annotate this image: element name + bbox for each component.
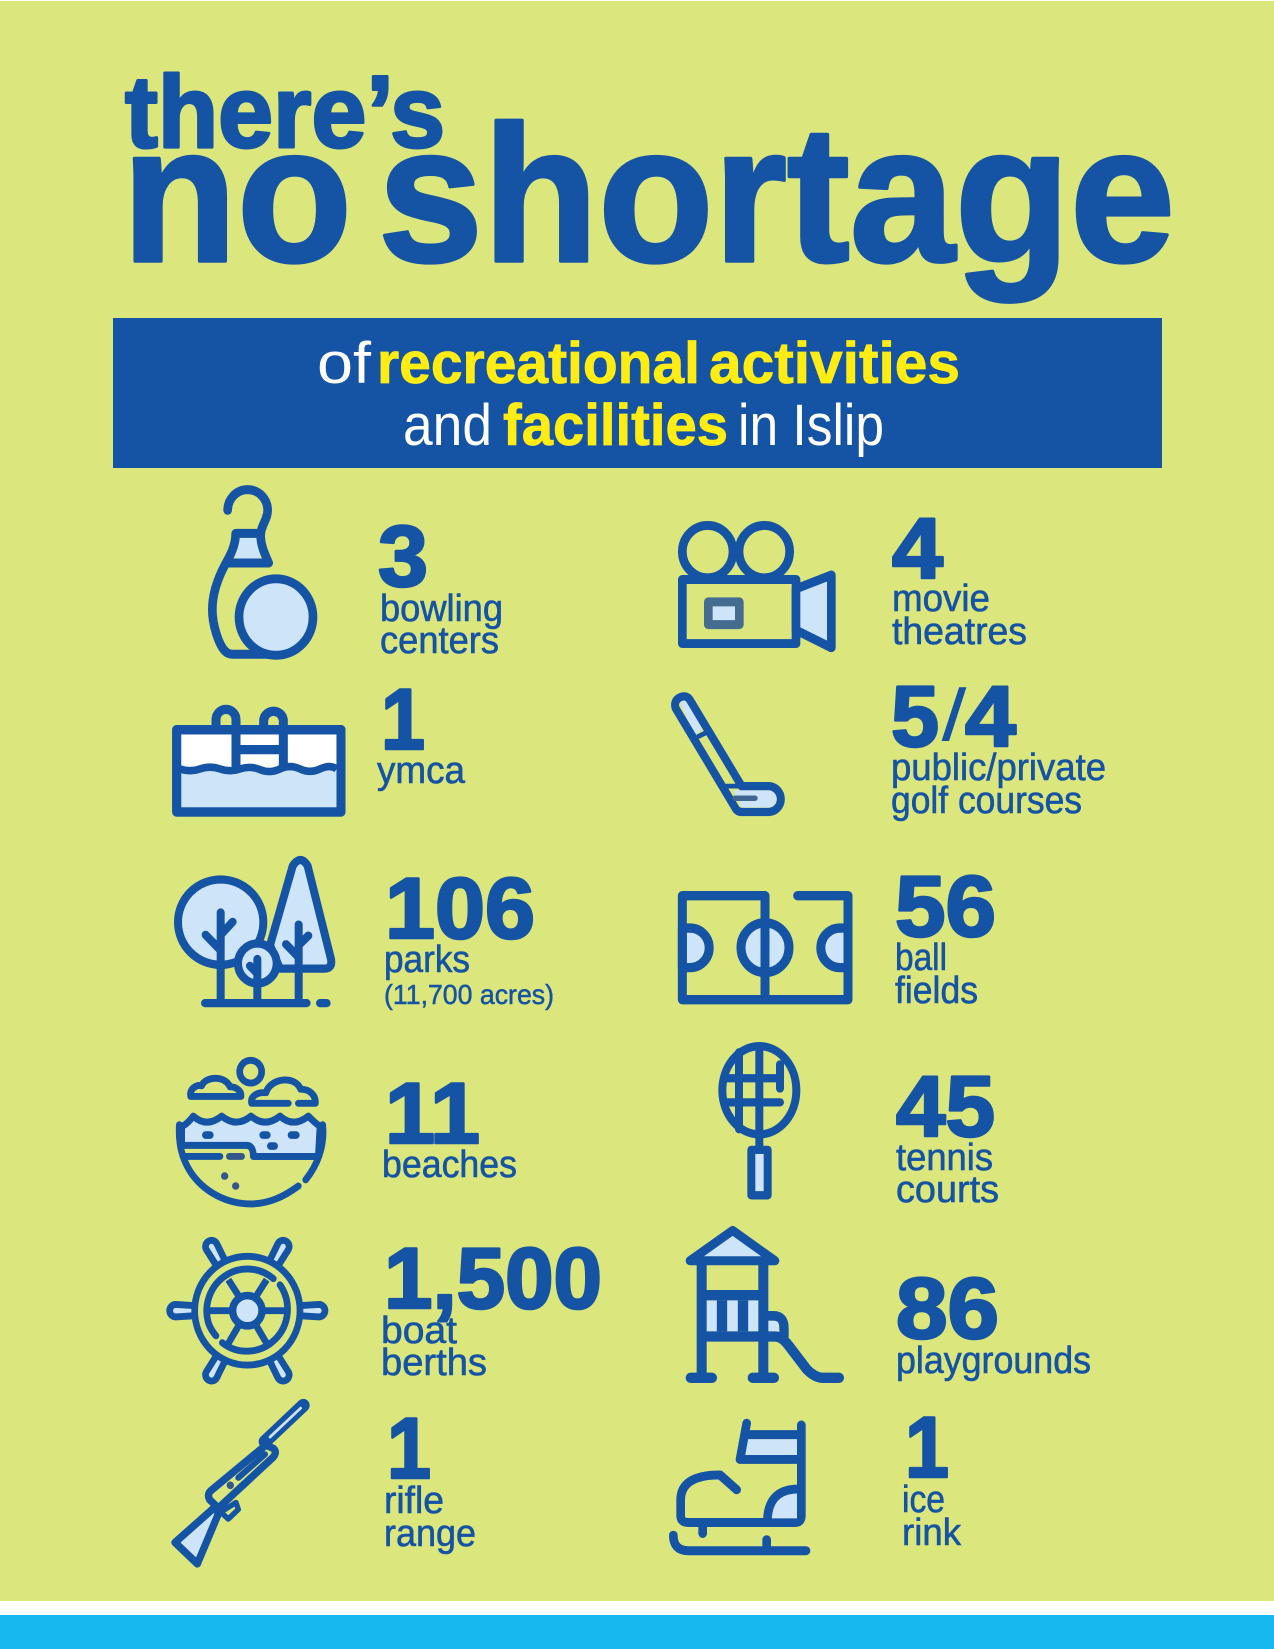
label: ball fields: fields: [895, 970, 978, 1012]
title: there’s: [125, 55, 445, 169]
number: 5/4: 4: [965, 669, 1016, 765]
label: public/private golf courses: [891, 747, 1106, 822]
icon: movie camera: [682, 525, 831, 648]
label: ymca: ymca: [377, 750, 466, 792]
icon: beach: [179, 1060, 323, 1204]
label: rifle range: range: [384, 1513, 476, 1555]
stat: boat berths: [170, 1231, 602, 1384]
number: 1,500: 1,500: [384, 1231, 602, 1327]
label: movie theatres: movie: [892, 578, 990, 620]
label: public/private golf courses: golf courses: [891, 780, 1082, 822]
stat: tennis courts: [722, 1046, 999, 1211]
number: 1: 1: [905, 1400, 949, 1496]
icon: golf club: [675, 696, 781, 812]
stat: beaches: [179, 1060, 517, 1204]
icon: swimming pool: [177, 709, 341, 812]
stat: ice rink: [673, 1400, 962, 1554]
label: bowling centers: [380, 588, 503, 662]
stat: bowling centers: [212, 490, 503, 662]
label: rifle range: [384, 1480, 476, 1555]
label: playgrounds: playgrounds: [896, 1340, 1091, 1382]
number: 45: 45: [896, 1059, 995, 1155]
label: public/private golf courses: public/private: [891, 747, 1106, 789]
icon: ship wheel: [170, 1238, 325, 1383]
number: 5/4: 5: [891, 669, 939, 765]
label: bowling centers: centers: [380, 620, 499, 662]
banner: subtitle: facilities: [503, 393, 728, 458]
label: beaches: beaches: [382, 1144, 517, 1186]
stat: ball fields: [682, 859, 996, 1012]
number: 5/4: /: [942, 676, 966, 756]
number: 3: 3: [378, 509, 428, 605]
icon: rifle: [175, 1405, 303, 1564]
title: no: [122, 86, 352, 303]
label: boat berths: boat: [381, 1310, 457, 1352]
icon: ice skate: [673, 1423, 806, 1551]
banner: subtitle: activities: [709, 331, 960, 396]
label: parks and acres: parks: [384, 939, 470, 981]
label: movie theatres: theatres: [892, 611, 1027, 653]
label: parks and acres: [384, 939, 554, 1010]
label: parks and acres: (11,700 acres): [384, 979, 554, 1010]
label: movie theatres: [892, 578, 1027, 653]
label: tennis courts: tennis: [896, 1137, 993, 1179]
number: 56: 56: [895, 859, 996, 955]
banner: subtitle: and: [403, 393, 492, 458]
label: ice rink: ice: [902, 1479, 945, 1521]
label: tennis courts: courts: [896, 1169, 999, 1211]
number: 1: 1: [387, 1401, 431, 1497]
icon: tennis racket: [722, 1046, 796, 1195]
banner: subtitle: in Islip: [738, 393, 884, 458]
label: ball fields: [895, 937, 978, 1012]
label: boat berths: berths: [381, 1342, 487, 1384]
number: 106: 106: [385, 861, 535, 957]
stat: golf courses: [675, 669, 1106, 822]
banner: subtitle: recreational: [377, 331, 700, 396]
label: rifle range: rifle: [384, 1480, 444, 1522]
icon: playground slide: [690, 1230, 839, 1378]
title: shortage: [378, 86, 1175, 303]
stat: parks: [178, 860, 554, 1010]
stat: rifle range: [175, 1401, 476, 1564]
label: tennis courts: [896, 1137, 999, 1211]
icon: bowling pin and ball: [212, 490, 313, 655]
stat: ymca: [177, 672, 466, 812]
label: ball fields: ball: [895, 937, 947, 979]
number: 86: 86: [896, 1261, 999, 1357]
icon: trees: [178, 860, 331, 1003]
label: bowling centers: bowling: [380, 588, 503, 630]
banner: subtitle: of: [317, 331, 372, 396]
icon: ball field: [682, 896, 848, 1000]
number: 5/4: [891, 669, 1016, 765]
number: 1: 1: [381, 672, 425, 768]
title: [122, 55, 1175, 303]
stat: playgrounds: [690, 1230, 1091, 1382]
label: ice rink: rink: [902, 1512, 962, 1554]
label: ice rink: [902, 1479, 962, 1554]
number: 4: 4: [892, 501, 943, 597]
number: 11: 11: [385, 1066, 480, 1162]
label: boat berths: [381, 1310, 487, 1384]
stat: movie theatres: [682, 501, 1027, 653]
banner: subtitle: [113, 318, 1162, 468]
